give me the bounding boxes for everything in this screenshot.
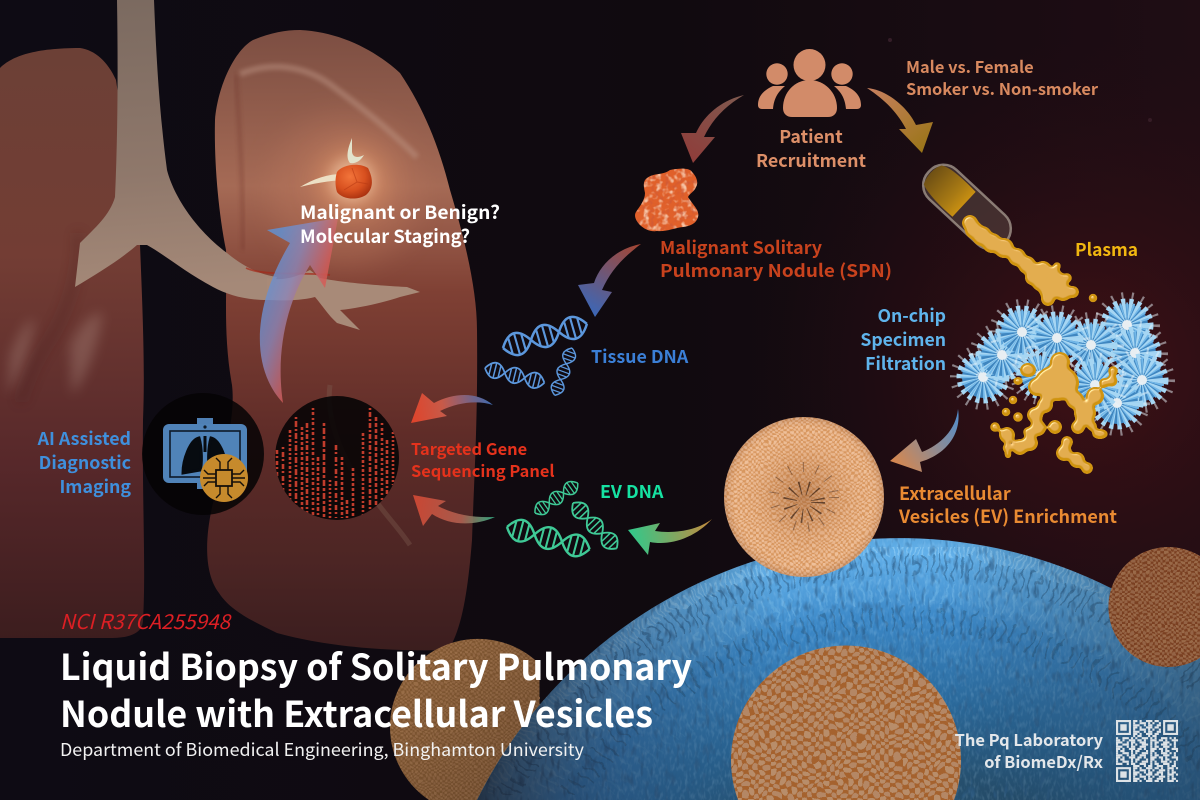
text: lab name: of BiomeDx/Rx: [984, 749, 1103, 773]
airway: trachea and bronchi: [75, 0, 420, 545]
arrow: patients to nodule: [681, 95, 744, 163]
text: on-chip specimen filtration: Specimen: [860, 327, 946, 352]
text: patient recruitment: Recruitment: [756, 147, 866, 173]
orange vesicle, lower: [731, 646, 961, 800]
text: AI assisted diagnostic imaging: AI Assisted: [37, 425, 131, 451]
text: EV enrichment: Vesicles (EV) Enrichment: [898, 503, 1117, 529]
text: on-chip specimen filtration: [860, 303, 946, 376]
lower lobes: [1071, 420, 1085, 434]
arrow: patients to plasma: [867, 88, 933, 153]
icon: EV DNA: [504, 478, 623, 560]
icon: malignant nodule: [635, 169, 698, 231]
title: Liquid Biopsy of Solitary Pulmonary: [60, 640, 692, 691]
icon: patients: [758, 49, 861, 117]
arrow: EV DNA to sequencing: [413, 495, 495, 526]
title: [60, 640, 692, 738]
arrow: tissue DNA to sequencing: [411, 393, 493, 423]
heading: nodule question: Molecular Staging?: [300, 223, 470, 249]
circle: sequencing gel: [275, 396, 399, 525]
heading: nodule question: Malignant or Benign?: [300, 199, 500, 225]
arrow: nodule to tissue DNA: [578, 244, 641, 317]
text: malignant SPN: Malignant Solitary: [660, 235, 822, 260]
text: malignant SPN: Pulmonary Nodule (SPN): [660, 258, 892, 283]
right lung: [207, 30, 477, 650]
subtitle: department: Department of Biomedical Engineering, Binghamton University: [60, 737, 584, 762]
text: cohort criteria: [906, 54, 1099, 100]
orange vesicle, EV enrichment: [724, 417, 884, 577]
text: EV enrichment: [898, 480, 1117, 529]
text: AI assisted diagnostic imaging: [37, 425, 131, 499]
icon: AI chip: [200, 454, 248, 502]
orange vesicle, right edge: [1108, 547, 1200, 667]
arrow: EV to EV DNA: [628, 519, 712, 555]
text: cohort criteria: Smoker vs. Non-smoker: [906, 76, 1099, 100]
text: patient recruitment: Patient: [779, 123, 843, 149]
text: targeted gene sequencing panel: [411, 436, 555, 482]
text: AI assisted diagnostic imaging: Diagnostic: [39, 449, 131, 475]
left lobes: [990, 422, 1000, 432]
text: lab name: The Pq Laboratory: [955, 727, 1104, 751]
text: AI assisted diagnostic imaging: Imaging: [59, 473, 131, 499]
text: EV DNA: EV DNA: [600, 478, 664, 504]
text: cohort criteria: Male vs. Female: [906, 54, 1034, 78]
droplets: [1013, 377, 1023, 385]
orange vesicle, left dim: [390, 638, 540, 800]
icon: on-chip filter burrs: [962, 304, 1163, 424]
text: targeted gene sequencing panel: Targeted Gene: [411, 436, 527, 460]
icon: tissue DNA: [483, 313, 590, 398]
arrow: filtration to EV: [890, 409, 959, 472]
icon: blood tube: [915, 157, 1019, 257]
text: tissue DNA: Tissue DNA: [591, 343, 689, 369]
text: EV enrichment: Extracellular: [899, 480, 1011, 506]
icon: plasma blobs: [962, 215, 1118, 474]
nodule in lung: [300, 138, 386, 216]
text: plasma: Plasma: [1075, 237, 1138, 262]
blue hairy vesicle, large: [477, 538, 1200, 800]
left lung: [0, 48, 144, 638]
arrow: sequencing to nodule (large): [260, 218, 338, 403]
mass: [1035, 365, 1079, 401]
text: grant number: NCI R37CA255948: [60, 605, 233, 635]
text: patient recruitment: [756, 123, 866, 173]
circle: AI imaging icon: [142, 393, 264, 515]
title: Nodule with Extracellular Vesicles: [60, 687, 653, 738]
text: lab name: [955, 727, 1104, 773]
text: on-chip specimen filtration: Filtration: [865, 351, 946, 376]
text: on-chip specimen filtration: On-chip: [877, 303, 946, 328]
text: malignant SPN: [660, 235, 892, 283]
stream: [962, 215, 978, 231]
heading: nodule question: [300, 199, 500, 249]
QR code: [1116, 721, 1178, 781]
icon: monitor: [163, 418, 247, 489]
text: targeted gene sequencing panel: Sequencing Panel: [411, 458, 555, 482]
